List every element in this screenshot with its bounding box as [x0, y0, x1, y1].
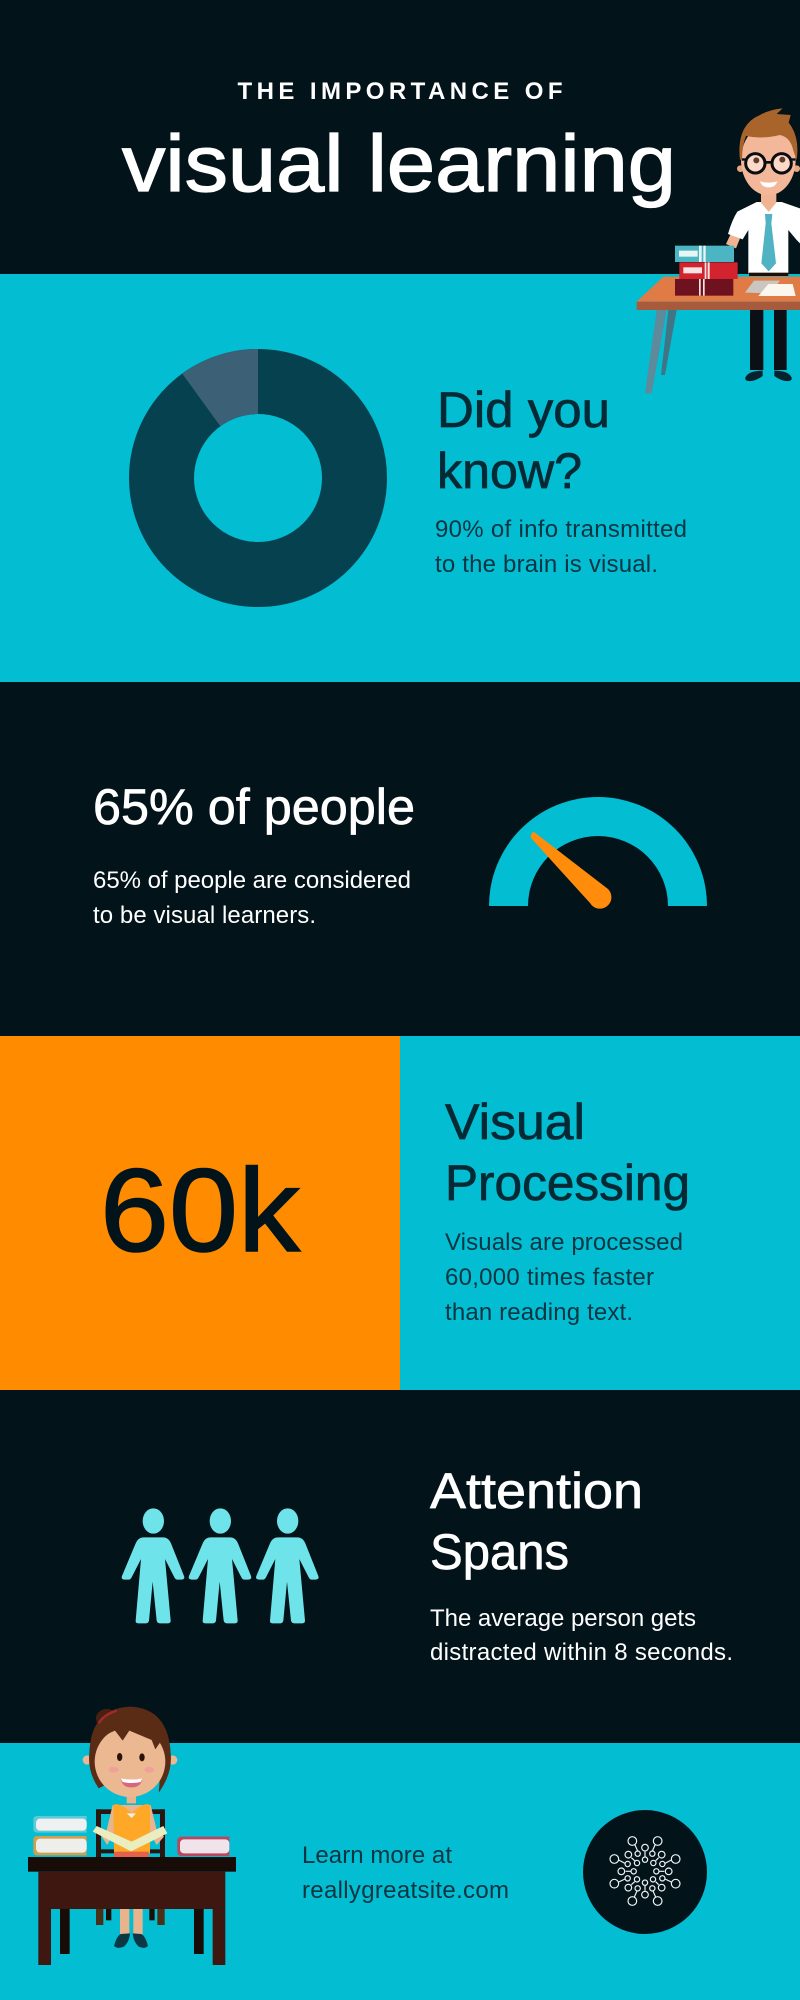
text: attention spans: The average person gets [430, 1605, 696, 1632]
heading: visual processing [445, 1094, 690, 1211]
text: attention spans: distracted within 8 seconds. [430, 1639, 733, 1666]
text: learn more: reallygreatsite.com [302, 1877, 509, 1904]
heading: attention spans: Spans [430, 1524, 569, 1580]
heading: did you know [437, 382, 610, 499]
text: attention spans [430, 1605, 733, 1666]
text: visual processing [445, 1229, 683, 1326]
text: visual processing: than reading text. [445, 1299, 633, 1326]
illustration: student at desk [28, 1707, 236, 1965]
text: visual processing: Visuals are processed [445, 1229, 683, 1256]
panel: visual processing [0, 1036, 690, 1390]
text: visual learners [93, 867, 411, 929]
heading: visual processing: Processing [445, 1155, 690, 1211]
icon: network circle [583, 1810, 707, 1934]
panel: 65 percent of people [93, 779, 707, 929]
heading: did you know: know? [437, 443, 582, 499]
illustration: teacher at desk [637, 108, 800, 393]
orange stat block: 60k [100, 1145, 301, 1277]
panel: did you know [162, 349, 687, 578]
heading: visual processing: Visual [445, 1094, 585, 1150]
heading: attention spans: Attention [430, 1463, 643, 1519]
title [122, 78, 676, 208]
text: visual learners: to be visual learners. [93, 902, 316, 929]
text: did you know [435, 516, 687, 578]
panel: footer [28, 1707, 707, 1965]
heading: 65% of people: 65% of people [93, 779, 415, 835]
text: visual processing: 60,000 times faster [445, 1264, 654, 1291]
text: learn more [302, 1842, 509, 1904]
text: did you know: 90% of info transmitted [435, 516, 687, 543]
panel: attention spans [122, 1463, 733, 1666]
heading: did you know: Did you [437, 382, 610, 438]
text: visual learners: 65% of people are considered [93, 867, 411, 894]
gauge chart [489, 797, 707, 909]
icon: three people [122, 1508, 319, 1623]
donut chart: 90 percent [162, 349, 354, 574]
title: visual learning [122, 119, 676, 208]
text: learn more: Learn more at [302, 1842, 452, 1869]
orange stat block [0, 1036, 400, 1390]
title: THE IMPORTANCE OF [238, 78, 562, 105]
text: did you know: to the brain is visual. [435, 551, 658, 578]
heading: attention spans [430, 1463, 643, 1580]
